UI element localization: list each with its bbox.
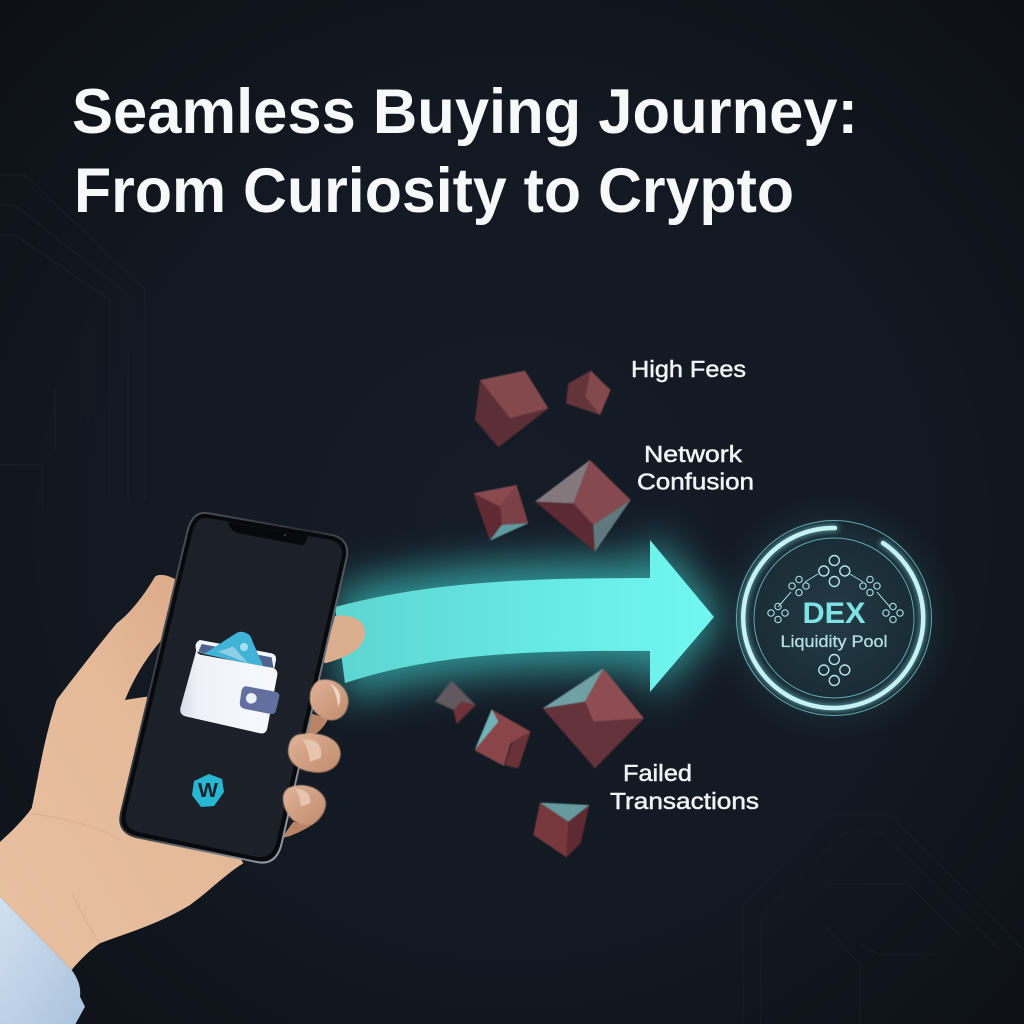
smartphone	[120, 513, 347, 863]
wallet body	[180, 647, 277, 734]
obstacle cube: lower large	[543, 668, 644, 768]
ring finger	[288, 733, 341, 773]
obstacle cube: bottom	[533, 803, 589, 857]
wallet clasp	[240, 686, 279, 714]
palm crease	[30, 813, 120, 943]
flow arrow from phone to DEX	[335, 530, 725, 702]
obstacle cube: lower left	[475, 709, 531, 768]
background circuit lines: left	[0, 175, 145, 510]
label: Failed Transactions	[610, 760, 759, 814]
obstacle cube: middle large	[535, 460, 631, 552]
obstacle cube: top left	[475, 371, 548, 447]
app logo hexagon: W	[198, 780, 218, 802]
label: Failed Transactions: Failed	[623, 760, 692, 786]
label: Network Confusion: Confusion	[637, 468, 754, 494]
wallet card teal	[204, 632, 263, 667]
obstacle cube: top right	[566, 371, 611, 415]
obstacle cube: lower small faded	[435, 681, 476, 724]
label: High Fees: High Fees	[631, 356, 746, 382]
title	[72, 77, 858, 226]
badge text: Liquidity Pool: Liquidity Pool	[780, 633, 888, 651]
badge text: DEX: DEX	[802, 597, 866, 630]
obstacle cube: middle left	[473, 485, 528, 541]
finger bases behind phone	[282, 713, 328, 838]
badge rings	[736, 520, 932, 716]
badge glow	[709, 493, 959, 743]
background circuit lines: bottom right	[743, 815, 1024, 1024]
label: Network Confusion	[637, 441, 754, 494]
little finger	[283, 785, 326, 825]
wallet icon	[180, 632, 279, 734]
DEX liquidity pool badge	[709, 493, 959, 743]
phone notch	[228, 522, 308, 545]
phone camera	[284, 534, 286, 536]
title: Seamless Buying Journey:	[72, 77, 858, 147]
hand and shirt cuff behind phone	[0, 575, 365, 1024]
middle finger	[310, 679, 348, 720]
app logo hexagon	[192, 774, 224, 807]
phone screen	[126, 518, 342, 857]
shirt cuff	[0, 895, 85, 1024]
palm and thumb	[0, 575, 243, 970]
label: Failed Transactions: Transactions	[610, 788, 759, 814]
wallet back strip	[196, 640, 276, 671]
index finger behind phone	[323, 615, 365, 663]
label: Network Confusion: Network	[644, 441, 742, 467]
title: From Curiosity to Crypto	[74, 156, 794, 226]
fingers over phone edge	[283, 679, 348, 825]
liquidity node network	[768, 556, 903, 686]
phone body	[120, 513, 347, 863]
